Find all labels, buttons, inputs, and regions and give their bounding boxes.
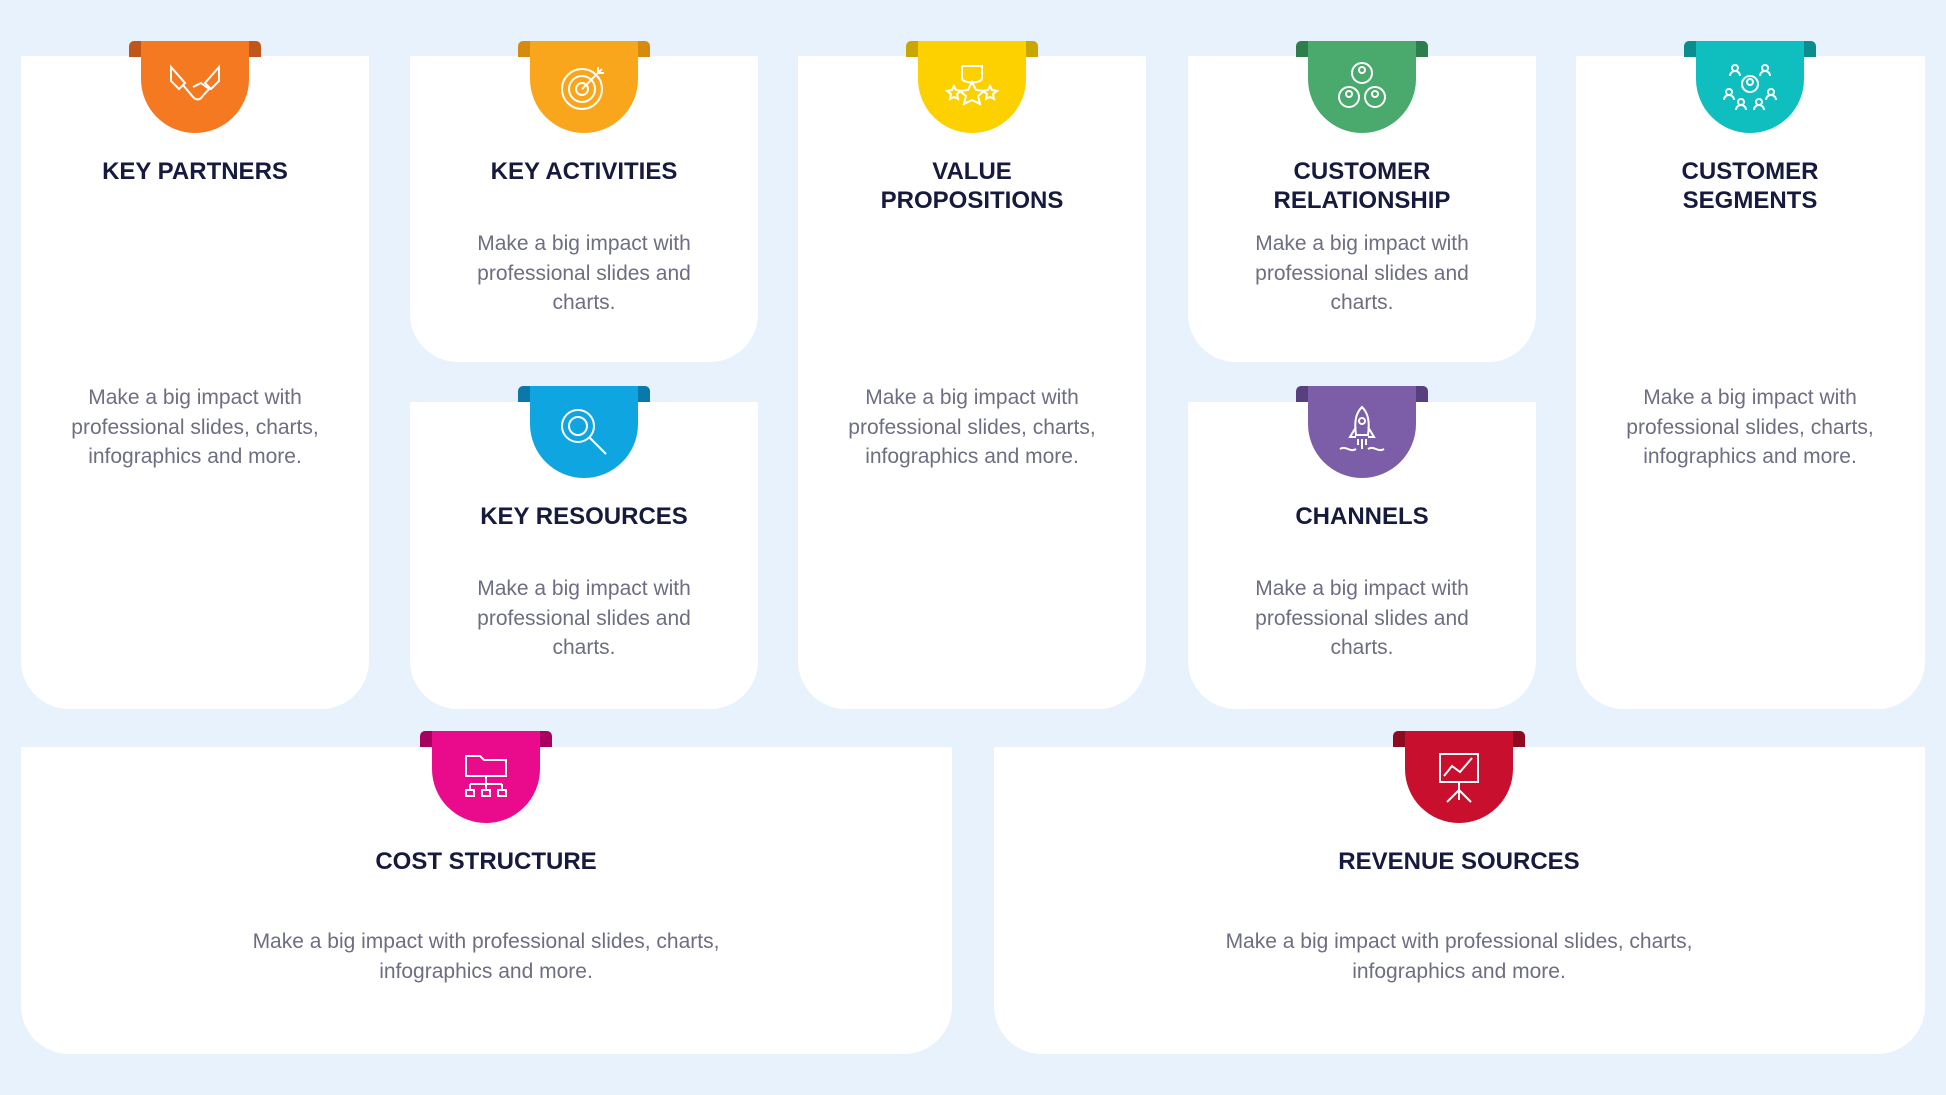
heading: customer relationship	[1274, 158, 1450, 214]
icon: folder network badge	[420, 731, 552, 823]
text: value propositions: Make a big impact with professional slides, charts, infographics and more.	[848, 386, 1096, 468]
text: customer segments: Make a big impact with professional slides, charts, infographics and more.	[1626, 386, 1874, 468]
heading: customer relationship: CUSTOMER	[1294, 158, 1430, 185]
text: cost structure: infographics and more.	[379, 960, 593, 982]
icon: rocket badge	[1296, 386, 1428, 478]
text: key activities: Make a big impact with professional slides and charts.	[477, 232, 691, 314]
icon: magnifier badge	[518, 386, 650, 478]
heading: customer segments: SEGMENTS	[1683, 187, 1817, 214]
heading: customer segments	[1682, 158, 1818, 214]
icon: handshake badge	[129, 41, 261, 133]
panel: customer segments	[1576, 56, 1925, 709]
panel: key partners	[21, 56, 369, 709]
heading: customer relationship: RELATIONSHIP	[1274, 187, 1450, 214]
icon: stars badge	[906, 41, 1038, 133]
text: cost structure	[253, 930, 719, 982]
text: revenue sources	[1226, 930, 1692, 982]
icon: people relationship badge	[1296, 41, 1428, 133]
heading: value propositions: PROPOSITIONS	[881, 187, 1063, 214]
heading: cost structure: COST STRUCTURE	[375, 848, 597, 875]
panel: value propositions	[798, 56, 1146, 709]
heading: customer segments: CUSTOMER	[1682, 158, 1818, 185]
heading: value propositions	[881, 158, 1063, 214]
panel: cost structure	[21, 747, 952, 1054]
text: customer relationship: Make a big impact with professional slides and charts.	[1255, 232, 1469, 314]
heading: channels: CHANNELS	[1295, 503, 1429, 530]
text: revenue sources: infographics and more.	[1352, 960, 1566, 982]
heading: revenue sources: REVENUE SOURCES	[1338, 848, 1580, 875]
panel: key activities	[410, 56, 758, 362]
heading: key activities: KEY ACTIVITIES	[491, 158, 677, 185]
text: cost structure: Make a big impact with professional slides, charts,	[253, 930, 719, 953]
heading: key partners: KEY PARTNERS	[102, 158, 288, 185]
text: key resources: Make a big impact with professional slides and charts.	[477, 577, 691, 659]
heading: key resources: KEY RESOURCES	[480, 503, 688, 530]
panel: customer relationship	[1188, 56, 1536, 362]
panel: channels	[1188, 402, 1536, 709]
text: revenue sources: Make a big impact with professional slides, charts,	[1226, 930, 1692, 953]
text: channels: Make a big impact with professional slides and charts.	[1255, 577, 1469, 659]
panel: revenue sources	[994, 747, 1925, 1054]
icon: presentation chart badge	[1393, 731, 1525, 823]
panel: key resources	[410, 402, 758, 709]
text: key partners: Make a big impact with professional slides, charts, infographics and more.	[71, 386, 319, 468]
icon: segments badge	[1684, 41, 1816, 133]
icon: target badge	[518, 41, 650, 133]
heading: value propositions: VALUE	[932, 158, 1012, 185]
